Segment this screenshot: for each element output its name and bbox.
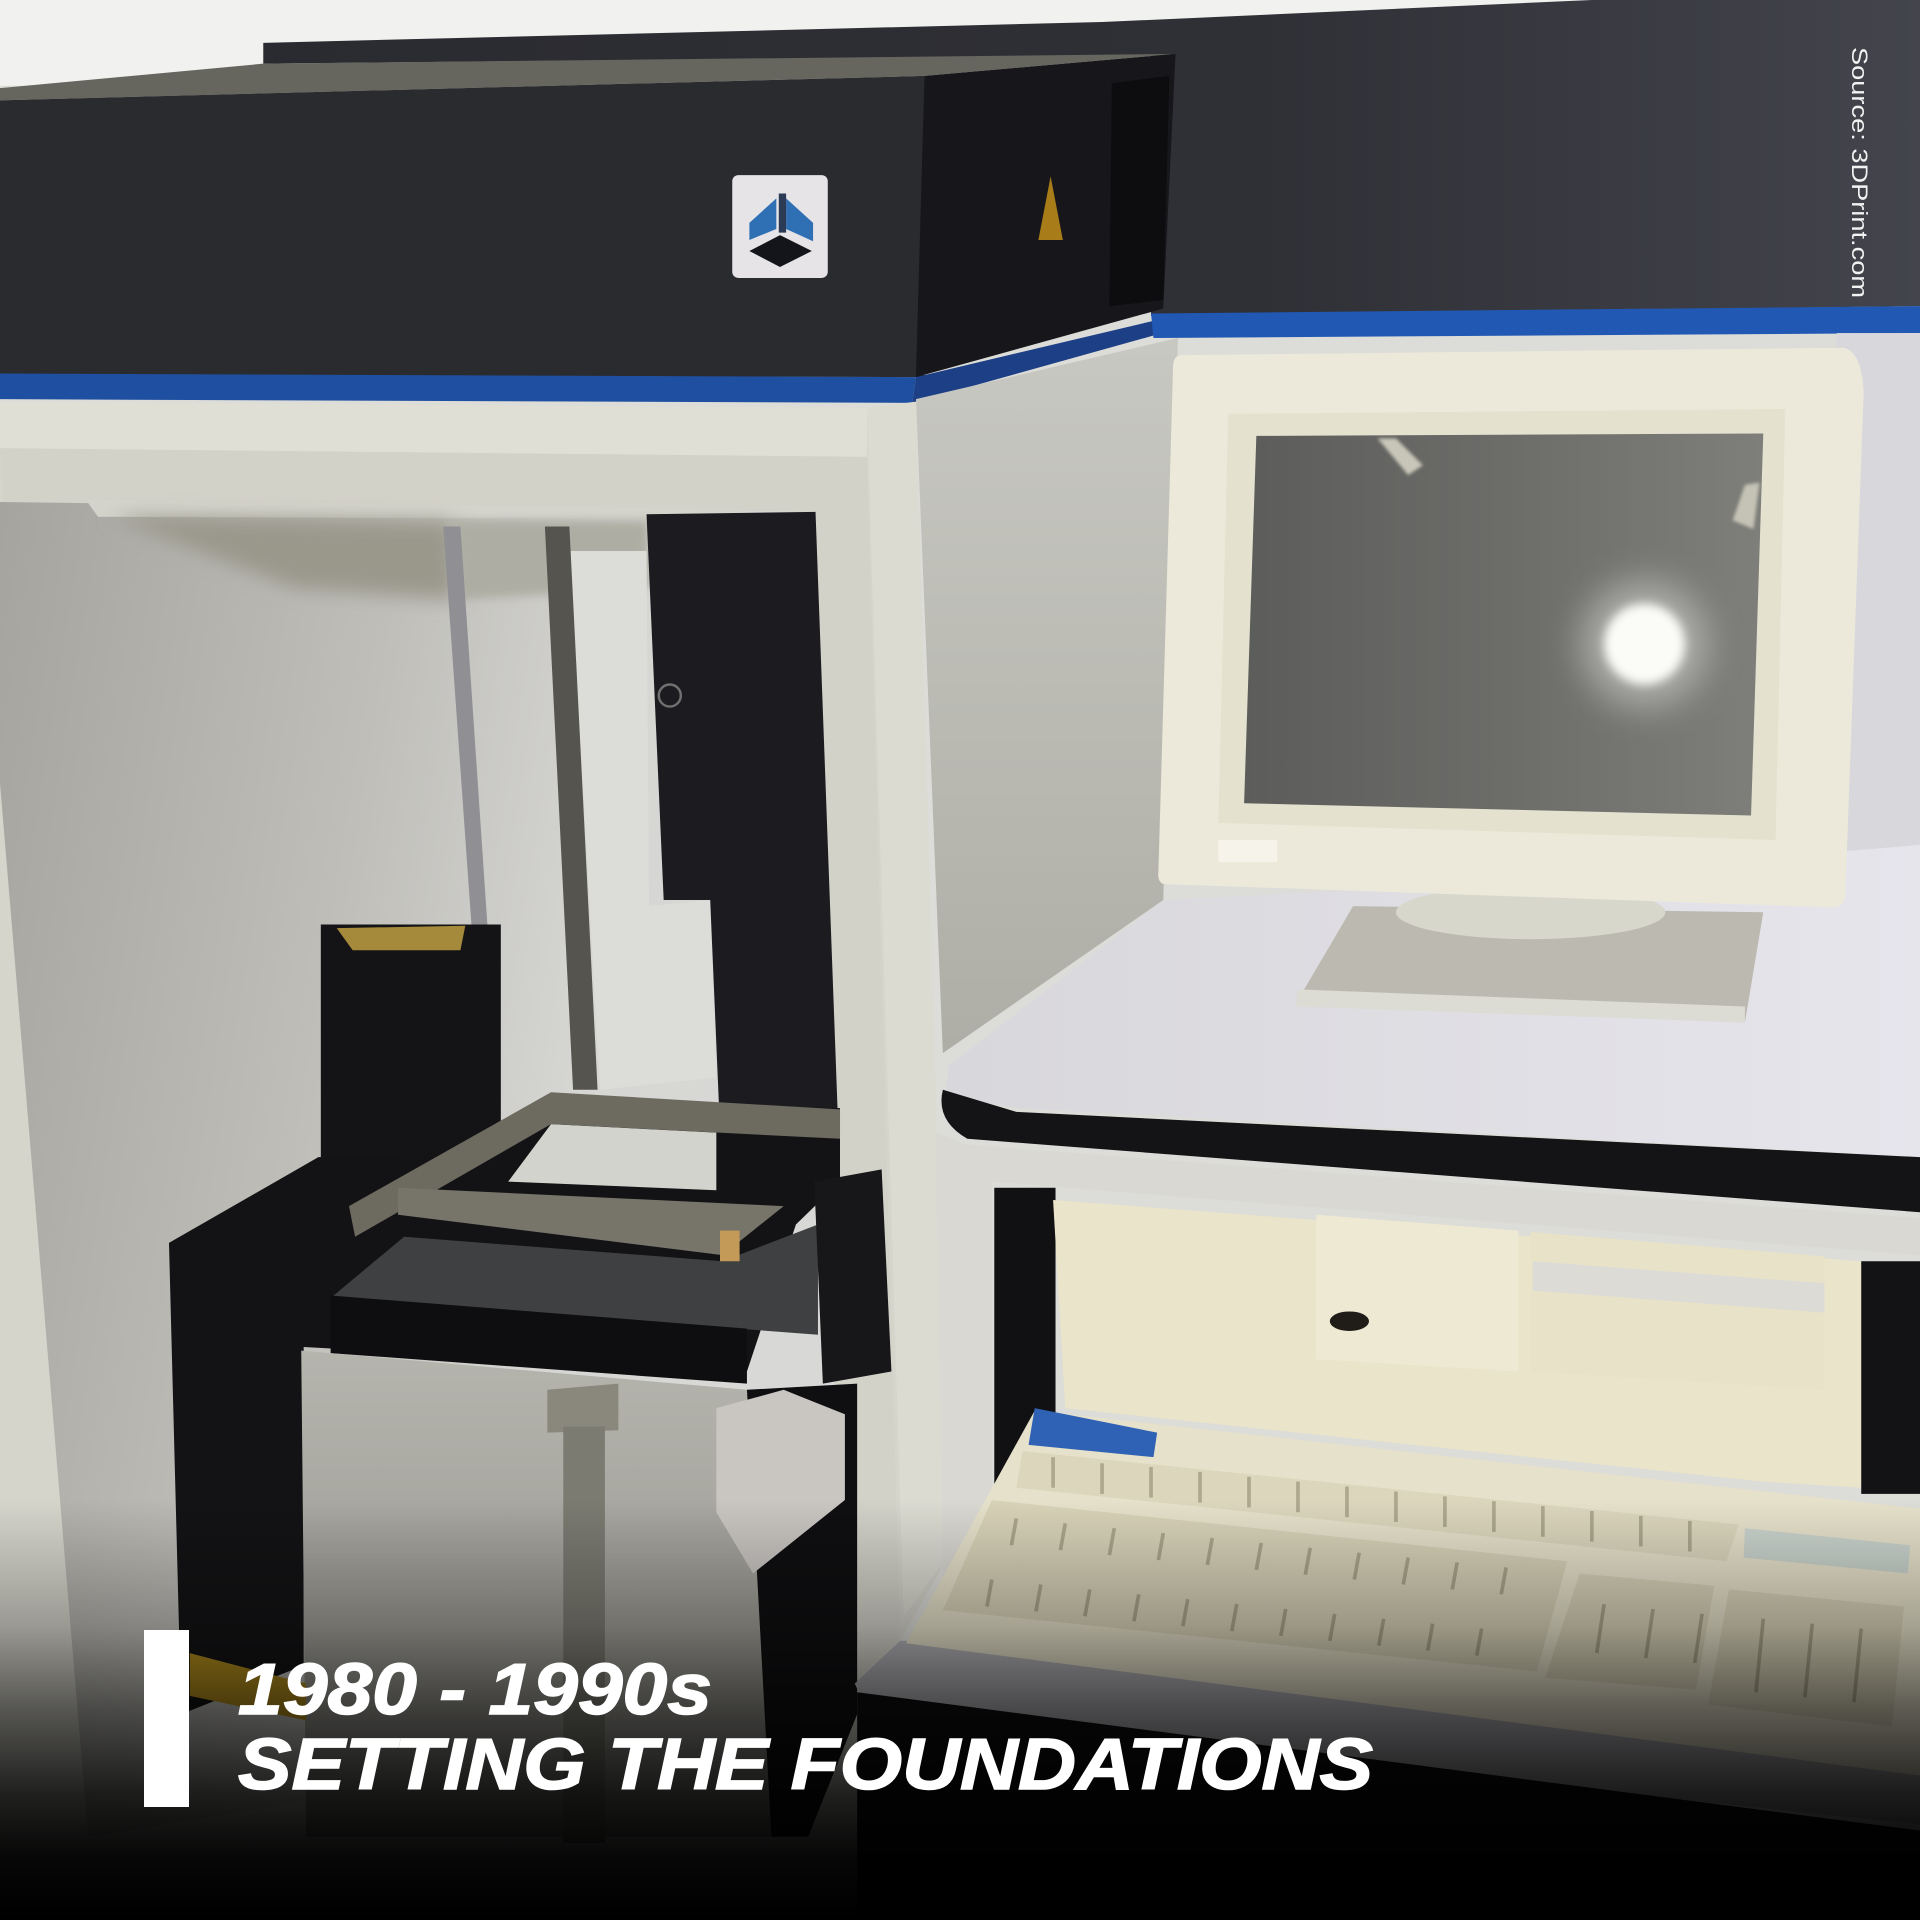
title: period: 1980 - 1990s bbox=[238, 1650, 712, 1730]
wall above the machine bbox=[0, 0, 1920, 86]
screen glare bbox=[1378, 438, 1760, 708]
resin vat and elevator assembly bbox=[169, 924, 891, 1843]
bottom dark gradient overlay bbox=[0, 1500, 1920, 1920]
icon: SLA cube logo bbox=[732, 175, 828, 278]
rear dark housing bbox=[263, 0, 1920, 316]
vent grille bbox=[1109, 76, 1169, 306]
machine cabinet side panel bbox=[916, 338, 1178, 1053]
desktop computer tower bbox=[1053, 1200, 1920, 1494]
cabinet front frame bbox=[0, 402, 949, 1837]
icon: laser warning triangle bbox=[1038, 176, 1063, 240]
source credit: Source: 3DPrint.com bbox=[1847, 47, 1872, 298]
keyboard bbox=[906, 1408, 1920, 1776]
title block bbox=[144, 1630, 1373, 1807]
monitor stand bbox=[1296, 885, 1763, 1022]
desk surface bbox=[936, 845, 1920, 1580]
build chamber interior bbox=[0, 500, 842, 1837]
front laser housing bbox=[0, 54, 1176, 377]
keyboard tray bbox=[855, 1408, 1920, 1920]
accent bar bbox=[144, 1630, 189, 1807]
title: heading: SETTING THE FOUNDATIONS bbox=[238, 1725, 1373, 1805]
blue trim bbox=[0, 306, 1920, 403]
CRT monitor bbox=[1158, 348, 1864, 1022]
right wall behind monitor bbox=[1837, 333, 1920, 872]
